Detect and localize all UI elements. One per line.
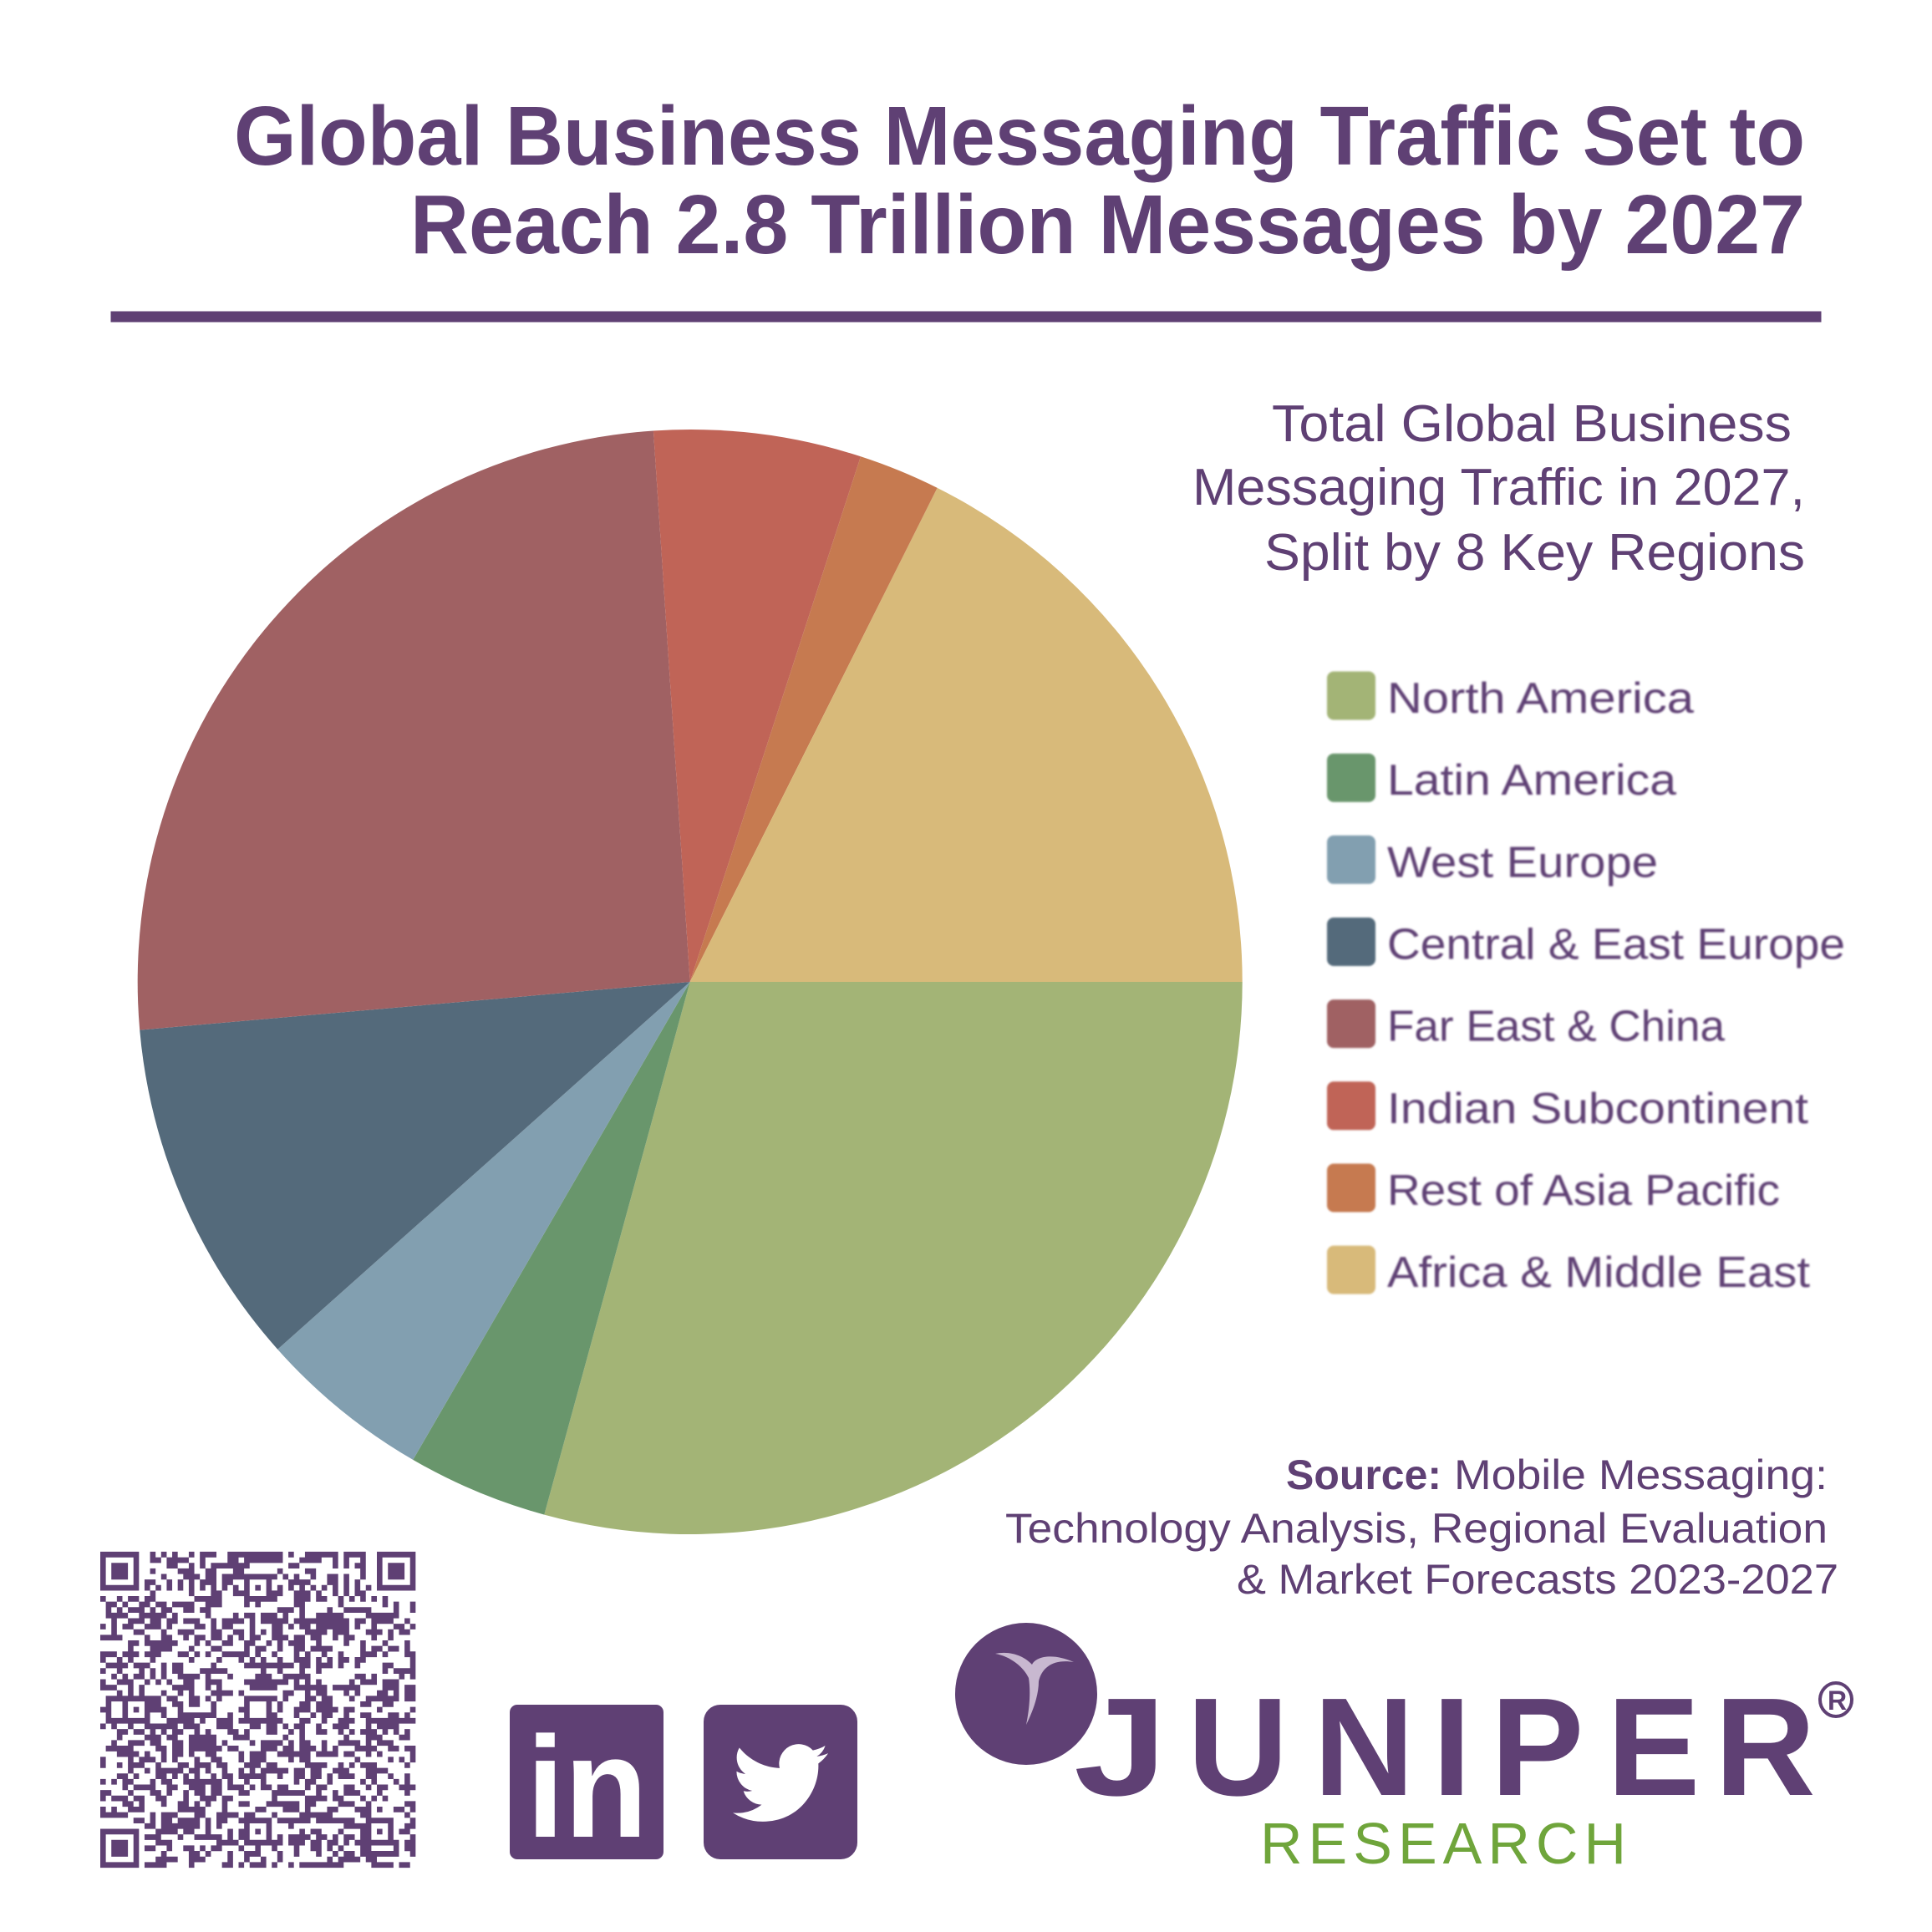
title: Reach 2.8 Trillion Messages by 2027: [410, 178, 1805, 272]
Juniper Research logo: [955, 1623, 1852, 1876]
slice: Africa & Middle East: [690, 488, 1243, 982]
pie chart: regional split: [138, 430, 1243, 1534]
chart subtitle: Total Global Business: [1272, 395, 1792, 453]
registered mark: R: [1828, 1685, 1847, 1716]
logo wordmark JUNIPER: J: [1074, 1670, 1167, 1825]
legend item: Africa & Middle East: Africa & Middle East: [1387, 1248, 1811, 1297]
legend item: Central & East Europe: Central & East Europe: [1387, 921, 1845, 969]
source note: & Market Forecasts 2023-2027: [1237, 1556, 1838, 1603]
source note: Source:: [1286, 1452, 1441, 1498]
slice: Indian Subcontinent: [653, 430, 861, 982]
slice: Latin America: [413, 982, 690, 1515]
title: Global Business Messaging Traffic Set to: [234, 89, 1805, 183]
icon: Twitter: [704, 1705, 857, 1859]
logo wordmark RESEARCH: RESEARCH: [1260, 1811, 1626, 1876]
icon: LinkedIn: in: [526, 1707, 648, 1868]
source note: [1005, 1452, 1838, 1603]
slice: West Europe: [277, 982, 690, 1460]
registered mark: [1820, 1683, 1852, 1716]
slice: Central & East Europe: [140, 982, 690, 1350]
logo emblem: [955, 1623, 1097, 1765]
slice: North America: [544, 982, 1243, 1534]
legend item: Far East & China: Far East & China: [1387, 1003, 1725, 1051]
title: [234, 89, 1805, 272]
slice: Far East & China: [138, 431, 690, 1030]
chart subtitle: [1192, 395, 1805, 582]
chart subtitle: Messaging Traffic in 2027,: [1192, 459, 1805, 516]
QR code: [100, 1554, 415, 1865]
legend item: Rest of Asia Pacific: Rest of Asia Pacific: [1387, 1167, 1780, 1215]
source note: Technology Analysis, Regional Evaluation: [1005, 1505, 1828, 1552]
legend item: North America: North America: [1387, 674, 1694, 723]
slice: Rest of Asia Pacific: [690, 456, 938, 982]
legend item: Indian Subcontinent: Indian Subcontinent: [1387, 1085, 1809, 1133]
legend: [1327, 672, 1845, 1297]
legend item: Latin America: Latin America: [1387, 756, 1676, 805]
legend item: West Europe: West Europe: [1387, 838, 1658, 887]
chart subtitle: Split by 8 Key Regions: [1264, 524, 1805, 582]
logo wordmark JUNIPER: UNIPER: [1187, 1670, 1816, 1825]
source note: Mobile Messaging:: [1454, 1452, 1828, 1498]
